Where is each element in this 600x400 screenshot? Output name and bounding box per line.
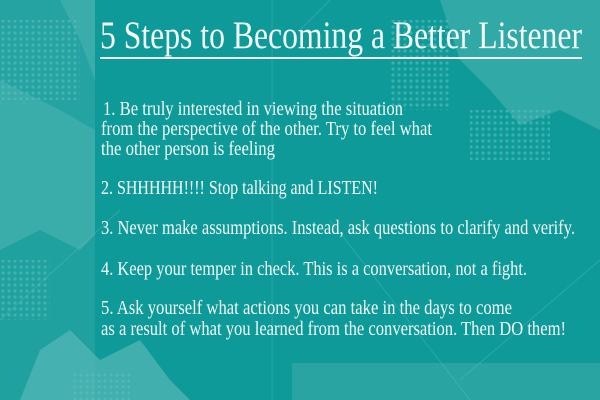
step 1 [101, 99, 432, 160]
step 1: from the perspective of the other. Try to feel what [101, 119, 432, 140]
step 1: 1. Be truly interested in viewing the situation [103, 99, 403, 120]
step 2: 2. SHHHHH!!!! Stop talking and LISTEN! [101, 178, 378, 199]
step 5: 5. Ask yourself what actions you can take in the days to come [101, 298, 512, 319]
step 4: 4. Keep your temper in check. This is a conversation, not a fight. [101, 259, 527, 280]
step 5 [101, 298, 566, 340]
step 1: the other person is feeling [101, 139, 275, 160]
